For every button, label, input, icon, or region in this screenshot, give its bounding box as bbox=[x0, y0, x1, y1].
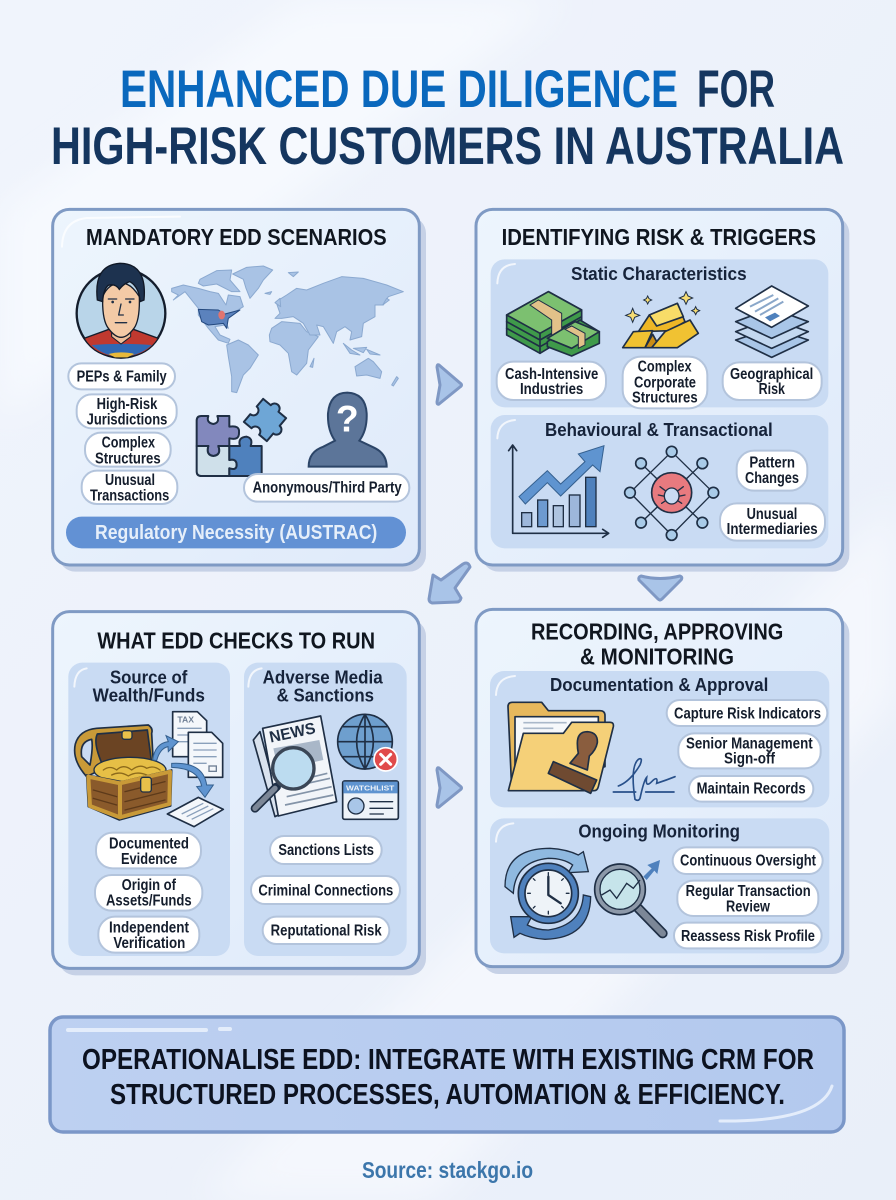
pill: senior management sign-off: Senior Management bbox=[686, 735, 813, 752]
pill: regular transaction review bbox=[677, 881, 818, 916]
icon: newspaper with magnifier bbox=[253, 716, 337, 817]
pill: origin of assets and funds: Assets/Funds bbox=[106, 892, 192, 909]
icon: magnifier with trend bbox=[595, 860, 663, 933]
column: adverse media and sanctions bbox=[244, 663, 407, 956]
icon: anonymous silhouette: ? bbox=[336, 397, 359, 439]
pill: origin of assets and funds: Origin of bbox=[122, 877, 177, 894]
pill: criminal connections: Criminal Connections bbox=[258, 882, 393, 899]
icon: treasure chest bbox=[75, 725, 172, 820]
pill: senior management sign-off bbox=[678, 733, 821, 768]
icon: tax and wealth documents bbox=[167, 712, 223, 827]
pill: reputational risk bbox=[263, 917, 389, 944]
pill: high-risk jurisdictions bbox=[77, 394, 177, 428]
pill: reputational risk: Reputational Risk bbox=[271, 923, 382, 940]
pill: continuous oversight: Continuous Oversight bbox=[680, 853, 816, 870]
pill: maintain records bbox=[689, 776, 813, 802]
pill: continuous oversight bbox=[673, 847, 823, 874]
icon: globe with rejection mark bbox=[338, 714, 397, 771]
pill: capture risk indicators bbox=[667, 700, 827, 726]
pill: geographical risk: Geographical bbox=[730, 366, 813, 383]
pill: cash-intensive industries bbox=[497, 362, 606, 400]
pill: reassess risk profile: Reassess Risk Profile bbox=[681, 928, 815, 945]
sub-heading: Adverse Media bbox=[263, 666, 383, 687]
sub-heading bbox=[263, 666, 383, 706]
pill: pattern changes: Changes bbox=[745, 470, 799, 487]
sub-panel: ongoing monitoring bbox=[490, 818, 829, 953]
panel: what EDD checks to run bbox=[53, 612, 426, 975]
sub-heading: Static Characteristics bbox=[571, 263, 747, 284]
pill: anonymous third party bbox=[244, 474, 409, 502]
icons: flow arrows bbox=[153, 736, 213, 797]
pill: complex corporate structures: Structures bbox=[632, 390, 698, 407]
icon: gold bars bbox=[623, 292, 700, 348]
sub-heading: Documentation & Approval bbox=[550, 674, 768, 695]
sub-heading: Ongoing Monitoring bbox=[578, 821, 740, 842]
heading: RECORDING, APPROVING bbox=[531, 618, 783, 644]
banner: operationalise EDD bbox=[50, 1017, 844, 1132]
icon: puzzle pieces bbox=[197, 395, 293, 476]
pill: unusual intermediaries: Intermediaries bbox=[727, 521, 818, 538]
icon: folder with stamp bbox=[508, 702, 613, 793]
pill: pattern changes bbox=[737, 451, 807, 491]
sub-heading: & Sanctions bbox=[277, 685, 374, 706]
panel: recording, approving and monitoring bbox=[476, 609, 849, 974]
arrow: triggers to checks bbox=[429, 563, 470, 603]
sub-heading: Wealth/Funds bbox=[93, 685, 205, 706]
icon: world map bbox=[172, 266, 403, 393]
pill: unusual transactions: Unusual bbox=[105, 472, 155, 489]
icon: network with bug bbox=[625, 446, 719, 540]
pill: documented evidence: Documented bbox=[109, 835, 189, 852]
pill: sanctions lists bbox=[270, 836, 382, 864]
pill: regular transaction review: Review bbox=[726, 898, 770, 915]
arrow: checks to recording bbox=[437, 768, 462, 807]
chart icon: rising bars and arrow bbox=[509, 445, 609, 537]
pill: unusual intermediaries bbox=[720, 503, 825, 541]
heading: IDENTIFYING RISK & TRIGGERS bbox=[502, 224, 816, 250]
pill: complex structures bbox=[85, 433, 171, 467]
icon: anonymous silhouette bbox=[309, 393, 387, 467]
pill: unusual transactions: Transactions bbox=[90, 488, 169, 505]
pill: unusual intermediaries: Unusual bbox=[747, 506, 797, 523]
pill: unusual transactions bbox=[82, 471, 177, 505]
sub-panel: documentation and approval bbox=[490, 671, 829, 807]
pill: pattern changes: Pattern bbox=[749, 455, 795, 472]
pill: sanctions lists: Sanctions Lists bbox=[278, 842, 374, 859]
pill: complex corporate structures bbox=[623, 357, 707, 408]
sub-heading: Behavioural & Transactional bbox=[545, 419, 773, 440]
pill: capture risk indicators: Capture Risk Indicators bbox=[674, 705, 821, 722]
pill: complex corporate structures: Corporate bbox=[634, 374, 696, 391]
pill: criminal connections bbox=[251, 876, 400, 904]
sub-panel: static characteristics bbox=[491, 259, 828, 408]
icon: clock with cycle arrows bbox=[505, 848, 591, 939]
pill: high-risk jurisdictions: High-Risk bbox=[97, 396, 158, 413]
pill: documented evidence: Evidence bbox=[121, 851, 177, 868]
icon: politically exposed person portrait bbox=[77, 263, 165, 358]
arrow: triggers to recording bbox=[639, 576, 682, 600]
pill: complex structures: Structures bbox=[95, 450, 161, 467]
column: source of wealth bbox=[68, 663, 230, 956]
heading bbox=[531, 618, 783, 669]
heading: WHAT EDD CHECKS TO RUN bbox=[97, 627, 375, 653]
icon: watchlist ID card: WATCHLIST bbox=[346, 784, 395, 793]
panel: identifying risk and triggers bbox=[476, 209, 849, 572]
pill: cash-intensive industries: Cash-Intensive bbox=[505, 366, 598, 383]
pill: cash-intensive industries: Industries bbox=[520, 381, 583, 398]
title: FOR bbox=[697, 60, 775, 119]
pill: reassess risk profile bbox=[674, 923, 822, 948]
arrow: scenarios to triggers bbox=[437, 365, 462, 404]
icon: signature bbox=[613, 759, 675, 800]
icon: newspaper with magnifier: NEWS bbox=[268, 720, 317, 747]
pill: complex structures: Complex bbox=[102, 435, 155, 452]
pill: independent verification: Independent bbox=[109, 919, 189, 936]
bar: regulatory necessity: Regulatory Necessity (AUSTRAC) bbox=[95, 522, 377, 544]
source: Source: stackgo.io bbox=[362, 1157, 533, 1183]
pill: senior management sign-off: Sign-off bbox=[724, 751, 776, 768]
pill: high-risk jurisdictions: Jurisdictions bbox=[87, 411, 167, 428]
pill: geographical risk bbox=[723, 362, 822, 400]
icon: tax and wealth documents: TAX bbox=[177, 715, 194, 725]
bar: regulatory necessity bbox=[66, 517, 406, 548]
panel: mandatory EDD scenarios bbox=[53, 209, 426, 572]
pill: anonymous third party: Anonymous/Third Party bbox=[253, 480, 402, 497]
sub-heading bbox=[93, 666, 205, 706]
sub-panel: behavioural and transactional bbox=[491, 415, 828, 548]
icon: watchlist ID card bbox=[343, 781, 398, 819]
pill: independent verification bbox=[98, 917, 199, 953]
pill: PEPs and family bbox=[68, 363, 175, 389]
pill: documented evidence bbox=[96, 833, 201, 868]
title: ENHANCED DUE DILIGENCE bbox=[120, 60, 678, 119]
pill: maintain records: Maintain Records bbox=[697, 780, 806, 797]
pill: complex corporate structures: Complex bbox=[638, 359, 692, 376]
sub-heading: Source of bbox=[110, 666, 188, 687]
icon: cash stacks bbox=[507, 292, 599, 356]
pill: PEPs and family: PEPs & Family bbox=[77, 369, 167, 386]
heading: & MONITORING bbox=[580, 643, 734, 669]
heading: MANDATORY EDD SCENARIOS bbox=[86, 224, 387, 250]
title bbox=[51, 60, 844, 176]
pill: regular transaction review: Regular Transaction bbox=[686, 883, 811, 900]
pill: independent verification: Verification bbox=[113, 935, 185, 952]
pill: geographical risk: Risk bbox=[759, 381, 785, 398]
pill: origin of assets and funds bbox=[95, 875, 202, 911]
icon: stacked geographic documents bbox=[736, 286, 808, 357]
